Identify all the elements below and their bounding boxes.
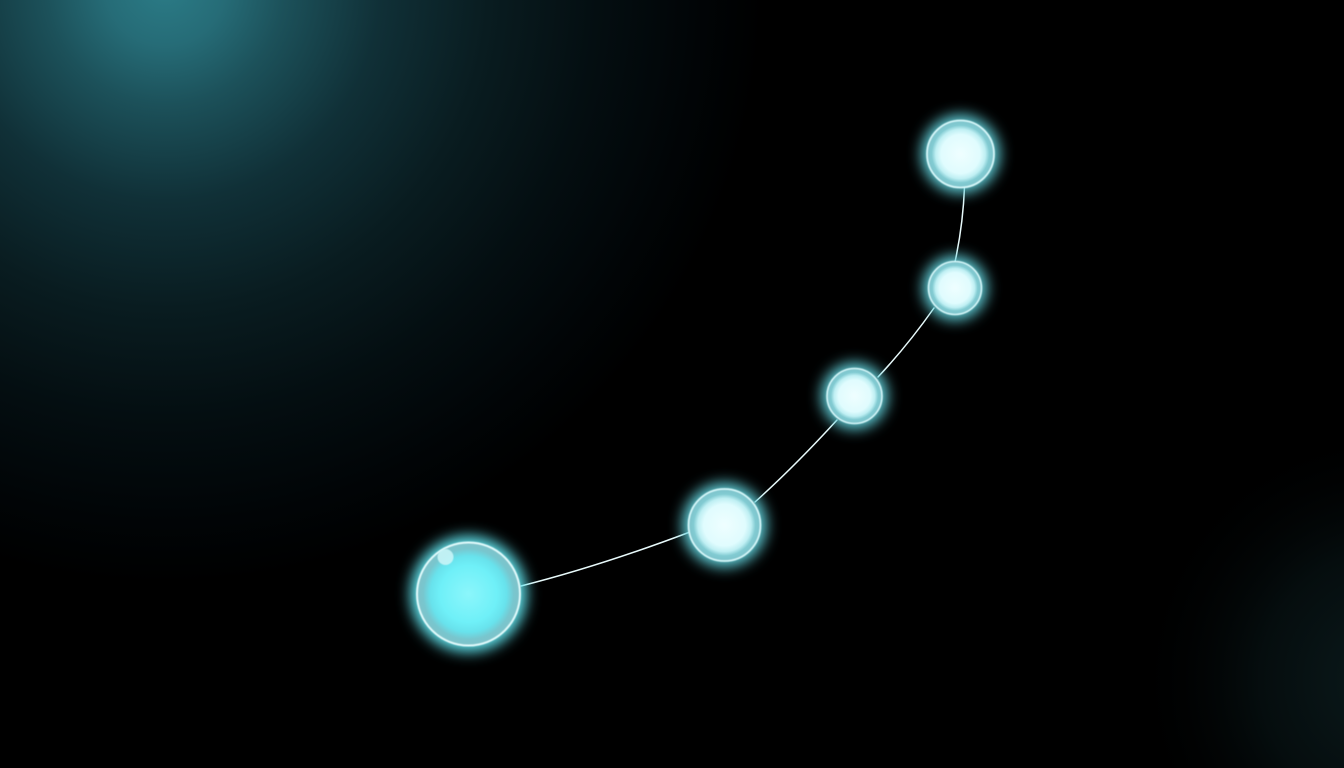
node 5 xyxy=(922,115,1000,193)
node 3 xyxy=(822,363,888,429)
node 2 xyxy=(682,483,766,567)
node 1: large cyan bubble xyxy=(410,536,526,652)
highlight xyxy=(438,549,454,565)
node 4 xyxy=(923,256,987,320)
connector lines between nodes xyxy=(521,187,964,586)
